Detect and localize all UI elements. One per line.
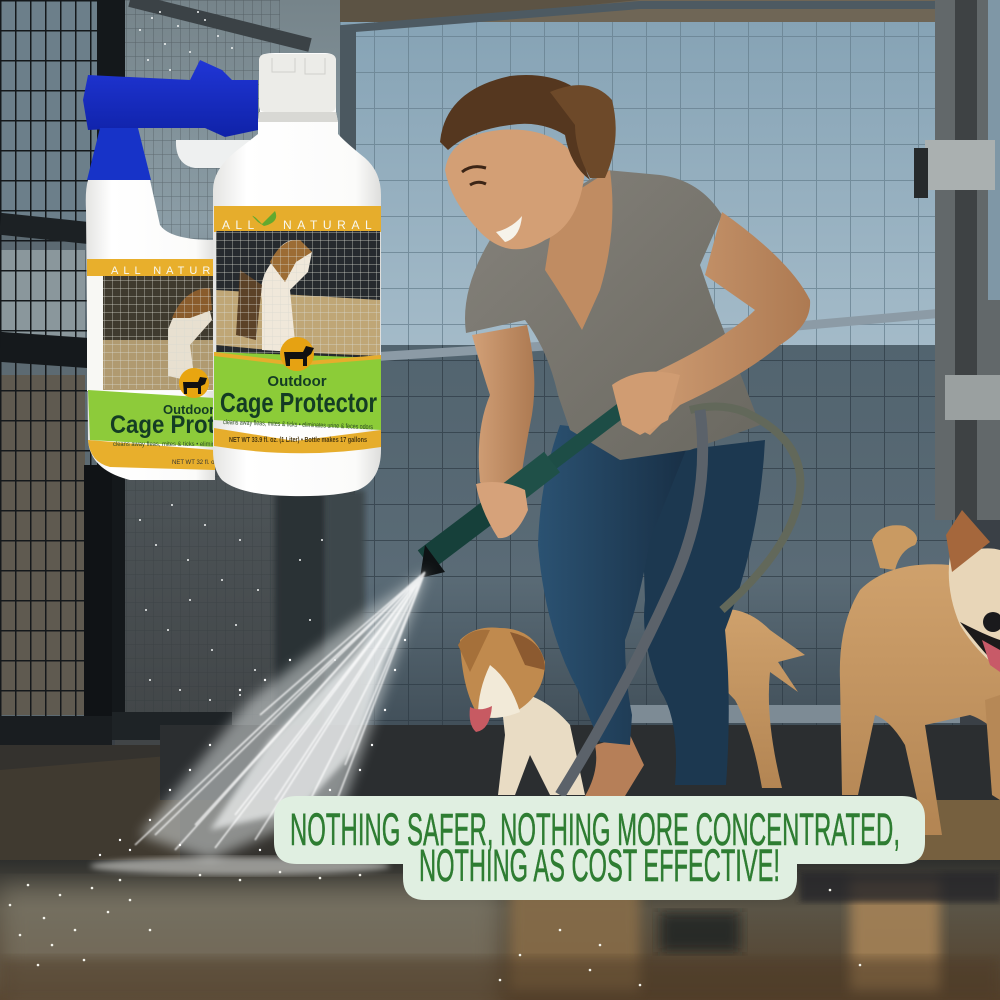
water spray <box>90 570 428 875</box>
label photo <box>216 231 380 361</box>
left arm holding nozzle <box>472 325 534 510</box>
product: hose-end sprayer bottle: Outdoor <box>163 402 214 417</box>
product: concentrate bottle: cleans away fleas, mites & ticks • eliminates urine & feces odors <box>223 419 373 431</box>
dog: small brown and white dog <box>458 628 585 795</box>
product: concentrate bottle: Cage Protector <box>220 387 377 418</box>
middle mesh panel <box>115 0 365 750</box>
concrete floor <box>0 745 1000 865</box>
back wall upper mesh <box>330 5 950 350</box>
water droplets on glass <box>140 12 335 700</box>
bottle body <box>86 180 215 480</box>
smile <box>496 216 522 242</box>
product: hose-end sprayer bottle: Cage Prot <box>110 411 216 439</box>
product: concentrate bottle: NATURAL <box>283 218 377 232</box>
product: concentrate bottle: NET WT 33.9 fl. oz. (1 Liter) • Bottle makes 17 gallons <box>229 437 367 444</box>
neck and chest <box>545 170 612 330</box>
dog: rear small dog body <box>716 609 805 788</box>
dog: large tan dog on right <box>840 510 1000 835</box>
product: hose-end sprayer bottle: cleans away fleas, mites & ticks • elimin <box>113 441 215 448</box>
wet reflective ground <box>0 860 1000 1000</box>
right gate post <box>914 0 1000 520</box>
blue sprayer head <box>83 60 258 137</box>
ponytail <box>550 85 616 178</box>
sprayer wand <box>420 402 632 578</box>
hose loop <box>690 406 800 610</box>
right arm <box>618 212 810 435</box>
head <box>445 130 585 249</box>
hair <box>440 75 590 180</box>
hands <box>476 482 528 538</box>
product: concentrate bottle: ALL <box>222 218 260 232</box>
product: hose-end sprayer bottle <box>83 60 258 480</box>
product: hose-end sprayer bottle: ALL NATUR <box>111 265 215 277</box>
jeans: back leg <box>640 440 765 785</box>
product: hose-end sprayer bottle: NET WT 32 fl. oz. <box>172 460 219 466</box>
left cage door <box>0 0 232 770</box>
bare foot <box>585 735 644 796</box>
callout: slogan banner <box>274 796 925 900</box>
woman <box>420 75 810 796</box>
shirt <box>465 170 760 460</box>
product: concentrate bottle <box>213 53 381 496</box>
label leaf <box>252 211 276 226</box>
back wall lower mesh <box>355 312 960 730</box>
eye and brow <box>462 167 486 185</box>
product: concentrate bottle: Outdoor <box>267 373 327 390</box>
slogan text <box>290 804 900 891</box>
jeans: front leg <box>538 425 690 745</box>
